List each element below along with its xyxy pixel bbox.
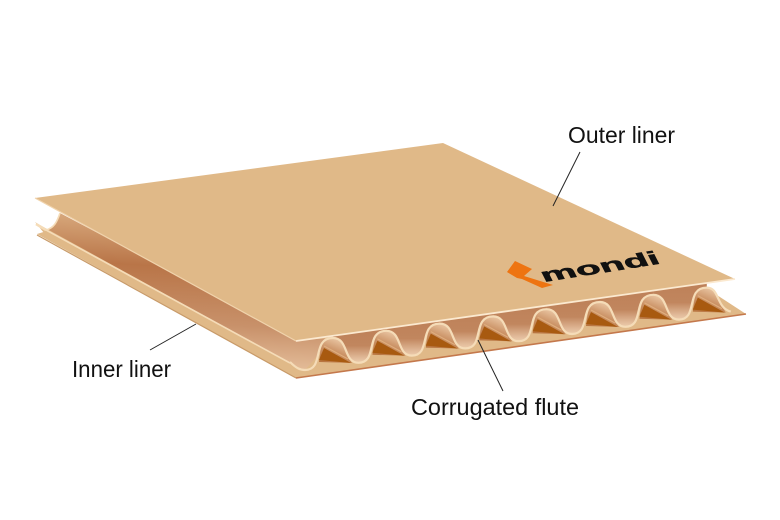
label: corrugated flute (411, 340, 579, 420)
label: corrugated flute: Corrugated flute (411, 394, 579, 420)
inner liner sheet (37, 230, 746, 378)
outer liner sheet (35, 143, 735, 341)
label: inner liner (72, 324, 196, 382)
corrugated flute waves (290, 282, 731, 370)
logo wordmark: mondi (536, 247, 664, 286)
mondi logo (507, 247, 664, 288)
logo mark (507, 261, 553, 288)
corrugated flute side edge (35, 213, 333, 372)
label: inner liner: Inner liner (72, 356, 171, 382)
label: outer liner (553, 122, 675, 206)
label: outer liner: Outer liner (568, 122, 675, 148)
corrugated board illustration (35, 143, 746, 378)
